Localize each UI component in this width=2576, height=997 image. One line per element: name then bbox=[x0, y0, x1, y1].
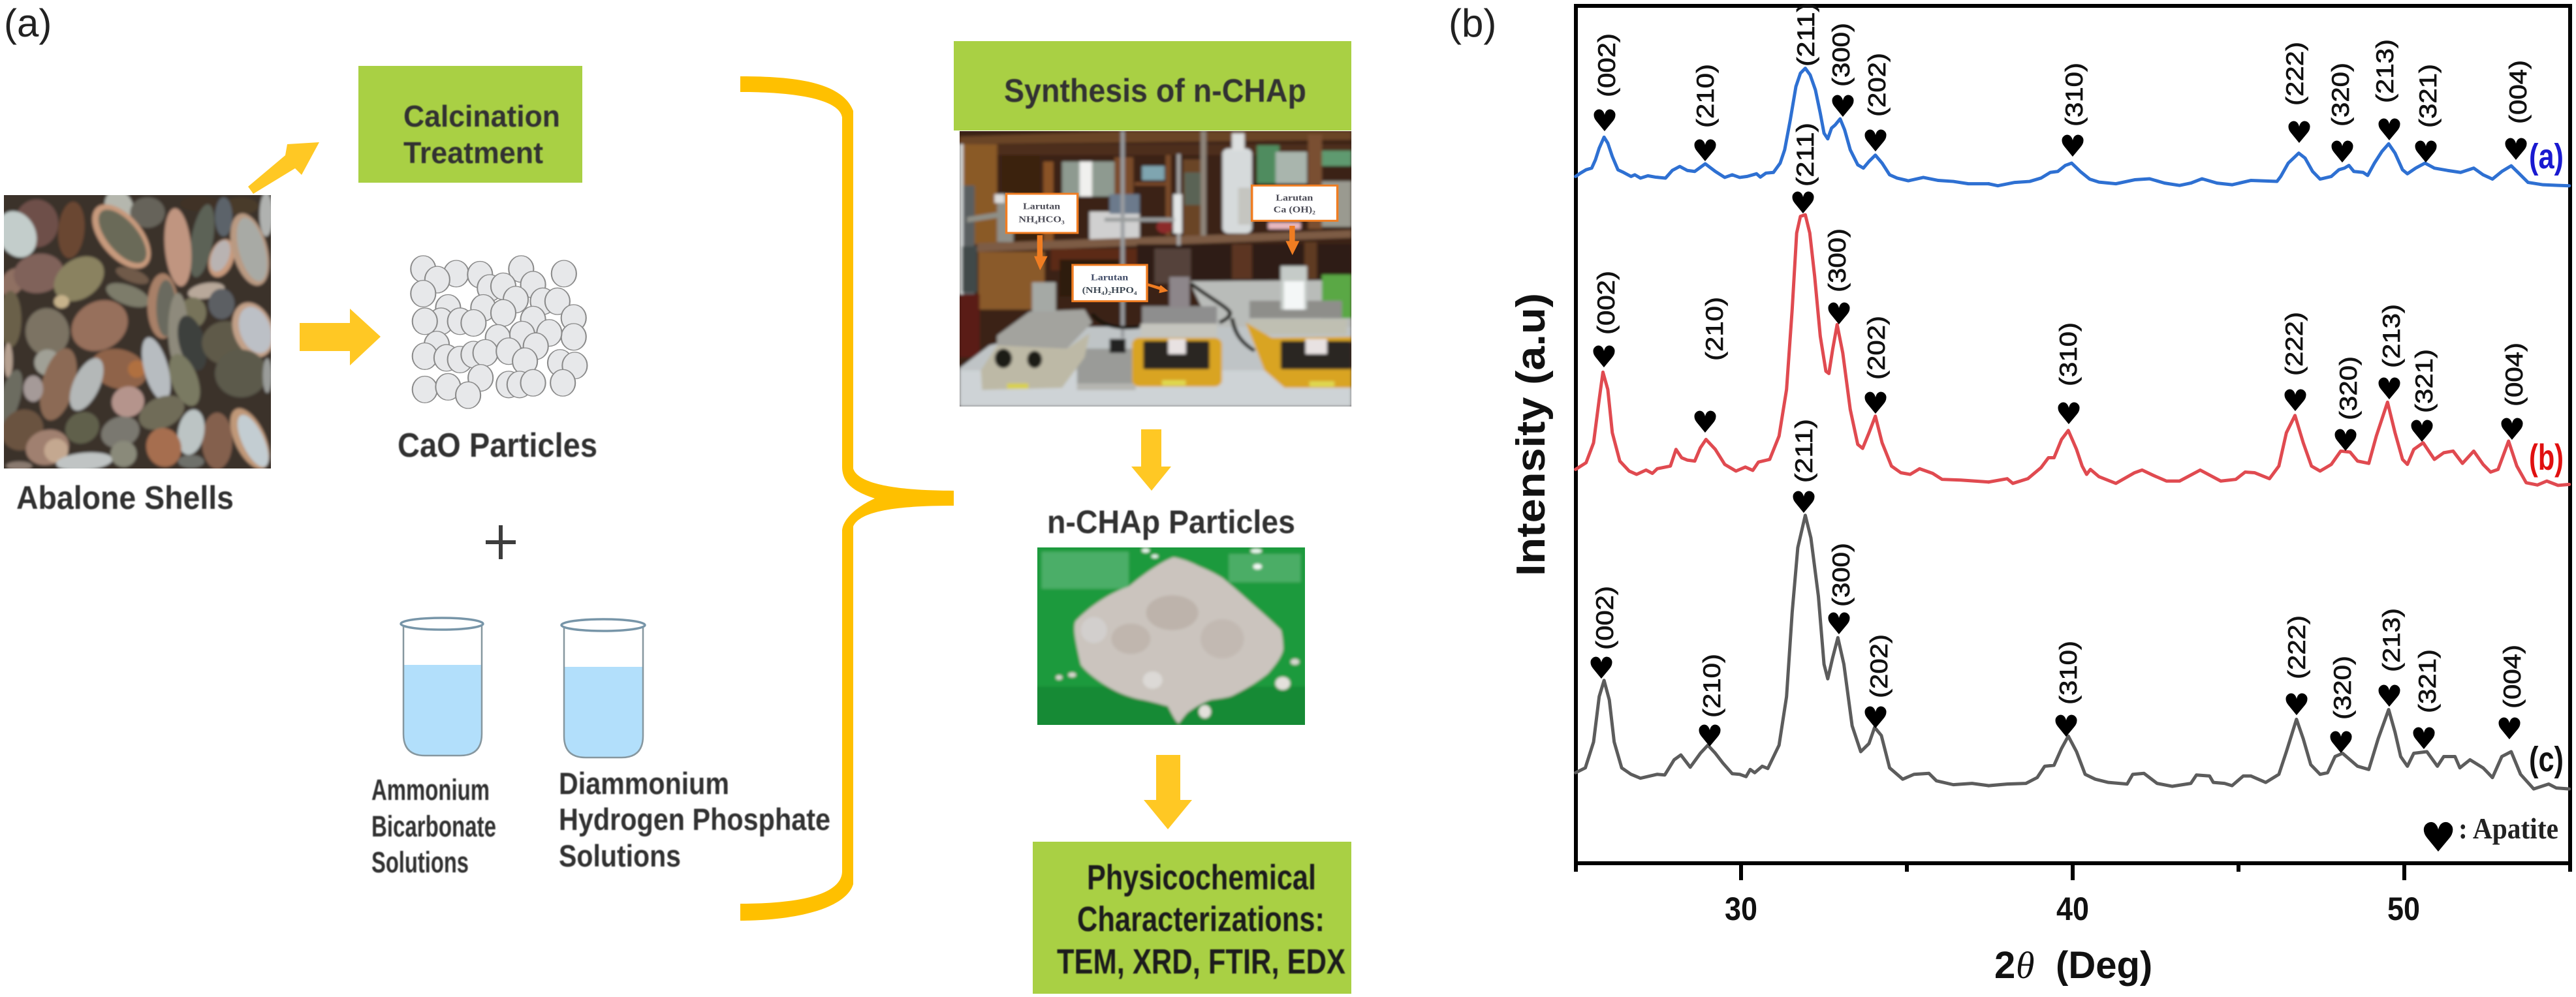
apatite markers: curve a: ♥ bbox=[1591, 103, 1618, 138]
peak labels: curve a: (300) bbox=[1828, 23, 1855, 87]
axis tick labels: 40 bbox=[2056, 891, 2089, 927]
arrow: shells to CaO bbox=[300, 309, 381, 365]
curve b: red bbox=[1576, 215, 2569, 485]
box: calcination treatment: Calcination bbox=[403, 99, 560, 133]
apatite markers: curve a: ♥ bbox=[2412, 134, 2440, 170]
label: abalone shells: Abalone Shells bbox=[16, 480, 234, 516]
callout: Ca(OH)2 solution: Ca (OH)₂ bbox=[1274, 206, 1315, 215]
x axis title: (Deg) bbox=[2056, 944, 2152, 987]
panel b: XRD chart bbox=[1449, 1, 2570, 987]
apatite markers: curve b: ♥ bbox=[2332, 423, 2359, 458]
peak labels: curve b: (002) bbox=[1593, 271, 1620, 335]
legend: apatite: ♥ bbox=[2420, 814, 2457, 861]
photo: synthesis setup bbox=[954, 127, 1357, 412]
label: diammonium hydrogen phosphate solutions: Diammonium bbox=[559, 766, 729, 801]
callout: NH4HCO3 solution bbox=[1007, 194, 1078, 270]
legend: apatite: : Apatite bbox=[2458, 812, 2558, 845]
icon: beaker 2 bbox=[561, 619, 645, 758]
peak labels: curve b: (202) bbox=[1863, 316, 1890, 380]
box: physicochemical characterizations: Characterizations: bbox=[1077, 900, 1325, 939]
apatite markers: curve b: ♥ bbox=[1691, 405, 1719, 440]
curve label b: (b) bbox=[2529, 437, 2564, 478]
apatite markers: curve b: ♥ bbox=[2408, 414, 2436, 449]
apatite markers: curve c: ♥ bbox=[2327, 725, 2355, 760]
peak labels: curve a: (320) bbox=[2327, 63, 2354, 127]
apatite markers: curve b: ♥ bbox=[1789, 185, 1817, 221]
chart frame and ticks bbox=[1576, 6, 2570, 880]
apatite markers: curve b: ♥ bbox=[1590, 339, 1618, 375]
callout: NH4HCO3 solution: NH₄HCO₃ bbox=[1018, 215, 1065, 224]
label: ammonium bicarbonate solutions bbox=[371, 773, 496, 879]
label: n-CHAp particles: n-CHAp Particles bbox=[1047, 504, 1295, 540]
panel label a: (a) bbox=[4, 1, 52, 45]
callout: Ca(OH)2 solution bbox=[1252, 185, 1338, 255]
peak labels: curve a: (211) bbox=[1793, 3, 1819, 67]
peak labels: curve b: (320) bbox=[2335, 356, 2362, 420]
peak labels: curve a: (213) bbox=[2372, 39, 2398, 103]
curve label a: (a) bbox=[2529, 137, 2564, 176]
curve a: blue bbox=[1576, 69, 2569, 186]
peak labels: curve a bbox=[1594, 3, 2532, 128]
icon: beaker 1 bbox=[401, 618, 483, 756]
peak labels: curve b: (213) bbox=[2378, 304, 2405, 368]
label: ammonium bicarbonate solutions: Bicarbonate bbox=[371, 810, 496, 843]
legend: apatite bbox=[2420, 812, 2558, 861]
apatite markers: curve b: ♥ bbox=[2498, 412, 2526, 447]
apatite markers: curve c: ♥ bbox=[2410, 721, 2438, 756]
label: CaO particles: CaO Particles bbox=[398, 427, 597, 465]
peak labels: curve a: (004) bbox=[2505, 60, 2532, 124]
panel a: synthesis flow bbox=[0, 1, 1357, 994]
peak labels: curve c: (002) bbox=[1592, 586, 1618, 650]
apatite markers: curve a: ♥ bbox=[2059, 129, 2086, 164]
peak labels: curve c: (004) bbox=[2499, 645, 2526, 709]
peak labels: curve a: (321) bbox=[2415, 64, 2442, 128]
apatite markers: curve b: ♥ bbox=[2282, 383, 2309, 418]
label: diammonium hydrogen phosphate solutions: Hydrogen Phosphate bbox=[559, 802, 830, 836]
x axis title: θ bbox=[2016, 944, 2034, 987]
peak labels: curve c: (210) bbox=[1699, 654, 1725, 718]
peak labels: curve c: (222) bbox=[2284, 615, 2310, 679]
apatite markers: curve a bbox=[1591, 89, 2530, 170]
box: physicochemical characterizations: TEM, XRD, FTIR, EDX bbox=[1057, 942, 1345, 981]
peak labels: curve b: (211) bbox=[1792, 123, 1819, 187]
peak labels: curve b: (210) bbox=[1701, 297, 1728, 361]
label: diammonium hydrogen phosphate solutions: Solutions bbox=[559, 838, 681, 873]
apatite markers: curve a: ♥ bbox=[2329, 134, 2356, 170]
box: calcination treatment: Treatment bbox=[403, 136, 543, 170]
axis tick labels: 50 bbox=[2387, 891, 2420, 927]
box: physicochemical characterizations bbox=[1033, 842, 1351, 994]
box: synthesis of n-CHAp: Synthesis of n-CHAp bbox=[1004, 72, 1306, 109]
peak labels: curve c: (300) bbox=[1828, 543, 1855, 607]
peak labels: curve b: (321) bbox=[2411, 349, 2438, 413]
panel label b: (b) bbox=[1449, 1, 1496, 45]
arrow: particles to characterizations bbox=[1144, 755, 1192, 829]
brace bbox=[740, 76, 954, 921]
icon: CaO particles bbox=[411, 256, 587, 408]
axis tick labels bbox=[1725, 891, 2420, 927]
callout: NH4HCO3 solution: Larutan bbox=[1023, 202, 1061, 211]
peak labels: curve a: (222) bbox=[2282, 42, 2308, 106]
peak labels: curve c: (202) bbox=[1866, 634, 1893, 698]
box: synthesis of n-CHAp bbox=[954, 41, 1351, 130]
peak labels: curve a: (002) bbox=[1594, 33, 1620, 97]
apatite markers: curve a: ♥ bbox=[2502, 132, 2530, 167]
apatite markers: curve c: ♥ bbox=[1588, 651, 1615, 686]
callout: (NH4)2HPO4 solution: Larutan bbox=[1091, 273, 1129, 283]
peak labels: curve b: (222) bbox=[2281, 312, 2308, 376]
apatite markers: curve a: ♥ bbox=[1862, 123, 1889, 159]
apatite markers: curve a: ♥ bbox=[2285, 115, 2313, 150]
box: physicochemical characterizations: Physicochemical bbox=[1087, 858, 1316, 897]
peak labels: curve c: (320) bbox=[2329, 656, 2356, 720]
apatite markers: curve b: ♥ bbox=[2376, 371, 2403, 406]
label: ammonium bicarbonate solutions: Solutions bbox=[371, 846, 469, 879]
apatite markers: curve c: ♥ bbox=[1696, 718, 1723, 754]
apatite markers: curve b: ♥ bbox=[1825, 296, 1853, 331]
apatite markers: curve b: ♥ bbox=[1862, 386, 1889, 421]
arrow: shells to calcination bbox=[248, 142, 319, 194]
apatite markers: curve c: ♥ bbox=[2496, 711, 2523, 746]
apatite markers: curve a: ♥ bbox=[2376, 112, 2403, 147]
peak labels: curve b bbox=[1593, 123, 2528, 420]
y axis title: Intensity (a.u) bbox=[1509, 293, 1554, 576]
callout: Ca(OH)2 solution: Larutan bbox=[1276, 194, 1313, 203]
box: calcination treatment bbox=[358, 66, 582, 183]
apatite markers: curve b bbox=[1590, 185, 2526, 458]
x axis title: 2 bbox=[1994, 944, 2015, 987]
peak labels: curve c bbox=[1592, 419, 2526, 720]
peak labels: curve c: (310) bbox=[2055, 641, 2082, 705]
peak labels: curve c: (321) bbox=[2414, 649, 2441, 713]
apatite markers: curve c: ♥ bbox=[2052, 709, 2080, 744]
curve label c: (c) bbox=[2529, 740, 2564, 779]
label: ammonium bicarbonate solutions: Ammonium bbox=[371, 773, 490, 806]
callout: (NH4)2HPO4 solution bbox=[1073, 265, 1169, 301]
label: diammonium hydrogen phosphate solutions bbox=[559, 766, 830, 873]
callout: (NH4)2HPO4 solution: (NH₄)₂HPO₄ bbox=[1082, 286, 1137, 296]
apatite markers: curve c: ♥ bbox=[2376, 679, 2403, 714]
peak labels: curve a: (310) bbox=[2061, 63, 2088, 127]
peak labels: curve a: (202) bbox=[1864, 53, 1891, 117]
peak labels: curve b: (310) bbox=[2055, 322, 2082, 386]
apatite markers: curve a: ♥ bbox=[1691, 133, 1719, 168]
curve c: gray bbox=[1576, 515, 2569, 789]
apatite markers: curve c: ♥ bbox=[2283, 687, 2310, 722]
photo: abalone shells bbox=[4, 195, 271, 468]
peak labels: curve b: (300) bbox=[1824, 228, 1851, 292]
peak labels: curve c: (211) bbox=[1791, 419, 1817, 483]
apatite markers: curve a: ♥ bbox=[1829, 89, 1857, 124]
arrow: synthesis to particles bbox=[1131, 429, 1171, 491]
peak labels: curve b: (004) bbox=[2501, 343, 2528, 406]
apatite markers: curve b: ♥ bbox=[2055, 396, 2082, 431]
plus sign bbox=[486, 525, 516, 559]
apatite markers: curve c: ♥ bbox=[1825, 606, 1853, 641]
peak labels: curve a: (210) bbox=[1692, 64, 1719, 128]
axis tick labels: 30 bbox=[1725, 891, 1757, 927]
peak labels: curve c: (213) bbox=[2378, 608, 2405, 672]
apatite markers: curve c: ♥ bbox=[1862, 700, 1889, 735]
apatite markers: curve c: ♥ bbox=[1790, 485, 1817, 520]
photo: n-CHAp powder bbox=[1033, 543, 1310, 730]
apatite markers: curve c bbox=[1588, 485, 2523, 760]
